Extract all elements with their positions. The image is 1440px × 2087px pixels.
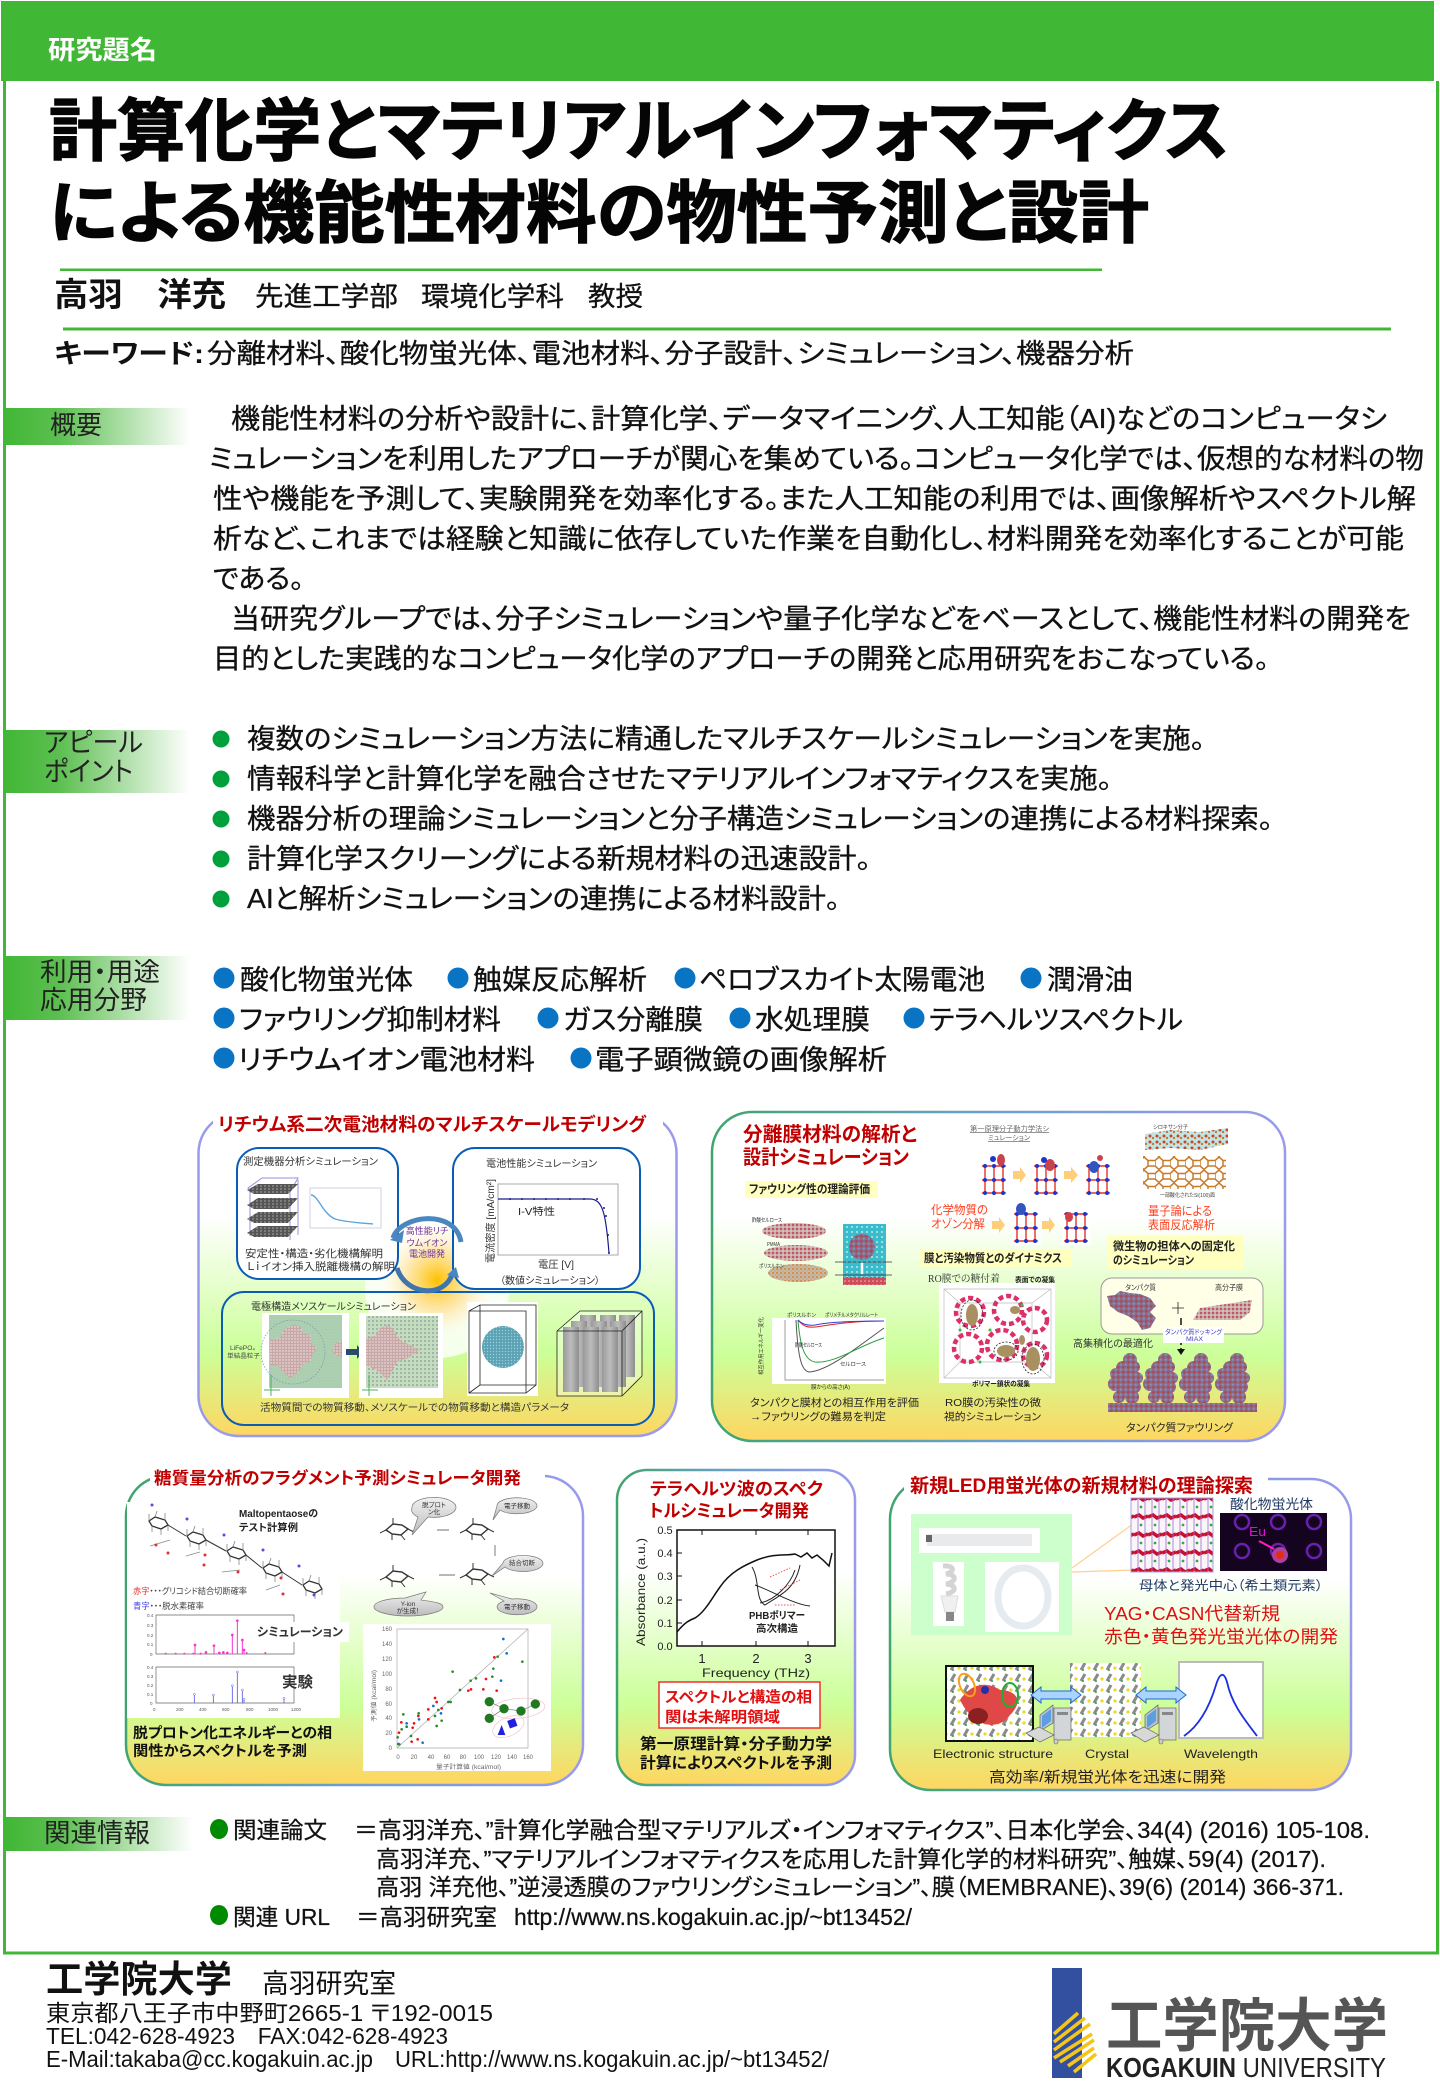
absorbance chart: 0.0 <box>657 1641 673 1653</box>
overview text: 機能性材料の分析や設計に、計算化学、データマイニング、人工知能（AI)などのコンピュータシ <box>231 403 1387 434</box>
red development text: 赤色・黄色発光蛍光体の開発 <box>1104 1627 1338 1647</box>
polymer structure sketch <box>752 1565 810 1606</box>
interaction energy chart: 酢酸セルロース <box>795 1341 822 1349</box>
correlation scatter plot: 20 <box>385 1731 393 1737</box>
reaction scheme: 電子移動 <box>504 1602 530 1611</box>
footer: university contact: 東京都八王子市中野町2665-1 〒192-0015 <box>46 2000 493 2026</box>
I-V chart: I-V特性 <box>518 1205 555 1218</box>
absorption graph <box>310 1188 381 1228</box>
application items: ファウリング抑制材料 <box>239 1004 501 1035</box>
panel caption <box>640 1734 832 1772</box>
header band <box>1 1 1434 81</box>
panel title <box>150 1468 545 1494</box>
membrane polymer models: ポリスルホン <box>759 1263 785 1270</box>
panel caption <box>133 1724 332 1760</box>
panel caption: 関性からスペクトルを予測 <box>133 1742 307 1760</box>
footer: university contact: 工学院大学 <box>46 1959 232 2000</box>
layered structure <box>247 1178 298 1240</box>
spiral bulb <box>933 1562 964 1626</box>
correlation scatter plot: 100 <box>382 1672 393 1678</box>
application items: 潤滑油 <box>1047 964 1133 995</box>
docking label and arrow: タンパク質ドッキング <box>1165 1327 1223 1336</box>
tube lamp <box>919 1528 1040 1553</box>
appeal bullet list: 複数のシミュレーション方法に精通したマルチスケールシミュレーションを実施。 <box>247 723 1205 754</box>
footer: university contact: TEL:042-628-4923 FAX:042-628-4923 <box>46 2023 448 2049</box>
simulated spectrum: 0.3 <box>147 1623 154 1628</box>
tab: overview <box>3 408 190 445</box>
mesoscale image 1 <box>261 1313 349 1398</box>
experimental spectrum: 200 <box>176 1707 184 1712</box>
cylinder array <box>557 1311 642 1396</box>
absorbance chart: 0.3 <box>657 1571 673 1583</box>
first-principles MD heading: ミュレーション <box>988 1135 1030 1142</box>
I-V chart: 電圧 [V] <box>538 1259 574 1271</box>
panel: separation membrane simulation: タンパク質ファウリング <box>1125 1421 1234 1434</box>
panel: lithium battery multiscale modeling <box>198 1106 676 1436</box>
correlation scatter plot: 予測値 (kcal/mol) <box>370 1670 378 1722</box>
protein and polymer film box: タンパク質 <box>1125 1282 1156 1292</box>
maltopentaose chain <box>149 1511 322 1599</box>
RO caption: RO膜の汚染性の微 <box>945 1396 1042 1409</box>
panel: separation membrane simulation: 高集積化の最適化 <box>1073 1337 1153 1350</box>
logo: Kogakuin University: KOGAKUIN UNIVERSITY <box>1106 2052 1386 2083</box>
section: overview <box>3 403 1424 674</box>
experimental spectrum <box>147 1665 302 1712</box>
application items: 水処理膜 <box>755 1004 870 1035</box>
absorbance chart: Frequency (THz) <box>702 1666 810 1680</box>
correlation scatter plot: 140 <box>382 1642 393 1648</box>
panel: separation membrane simulation: ポリマー鎖状の凝集 <box>972 1379 1030 1388</box>
correlation scatter plot: 100 <box>474 1755 485 1761</box>
papers and URL list: 関連論文 <box>233 1817 327 1843</box>
absorbance chart: 0.1 <box>657 1618 673 1630</box>
box: electrode mesoscale simulation <box>222 1292 654 1425</box>
red callout <box>659 1682 820 1728</box>
experimental spectrum: 0 <box>153 1707 156 1712</box>
RO membrane network <box>939 1283 1055 1383</box>
heading: membrane dynamics: 膜と汚染物質とのダイナミクス <box>924 1251 1062 1265</box>
speech bubbles <box>374 1497 543 1616</box>
protein fouling model <box>1108 1353 1257 1412</box>
siloxane surface model: 一部酸化されたSi(100)面 <box>1160 1191 1215 1199</box>
wavelength plot <box>1179 1662 1263 1738</box>
box: measurement simulation: 測定機器分析シミュレーション <box>243 1155 379 1168</box>
oxide phosphor label: 酸化物蛍光体 <box>1230 1497 1314 1512</box>
reaction scheme: 脱プロト <box>422 1500 446 1509</box>
papers and URL list: 高羽洋充、”マテリアルインフォマティクスを応用した計算化学的材料研究”、触媒、59(4) (2017). <box>376 1846 1326 1872</box>
crystal image <box>1070 1663 1141 1737</box>
ozone decomposition label: オゾン分解 <box>931 1217 985 1231</box>
application items: リチウムイオン電池材料 <box>238 1044 535 1075</box>
protein and polymer film box <box>1101 1278 1263 1334</box>
panel: terahertz spectrum simulator <box>617 1470 855 1785</box>
panel caption: 高効率/新規蛍光体を迅速に開発 <box>989 1769 1226 1786</box>
absorbance chart <box>634 1525 835 1680</box>
first-principles MD heading: 第一原理分子動力学法シ <box>970 1124 1049 1133</box>
correlation scatter plot: 40 <box>428 1755 435 1761</box>
reaction scheme: ン化 <box>427 1507 441 1516</box>
experimental spectrum: 0.3 <box>147 1674 154 1679</box>
appeal bullet list: 計算化学スクリーングによる新規材料の迅速設計。 <box>247 843 871 874</box>
label: experiment: 実験 <box>282 1674 313 1691</box>
footer: university contact <box>46 1959 830 2072</box>
absorbance chart: 0.5 <box>657 1525 673 1537</box>
author and affiliation: 先進工学部 <box>255 282 398 312</box>
simulated spectrum: 0.4 <box>147 1613 154 1618</box>
panel title: 分離膜材料の解析と <box>743 1123 917 1146</box>
panel caption: 第一原理計算・分子動力学 <box>640 1734 832 1753</box>
box: battery performance simulation: 電池性能シミュレーション <box>486 1157 598 1170</box>
papers and URL list <box>210 1817 1370 1930</box>
keywords: キーワード: <box>54 339 204 369</box>
image labels <box>933 1747 1258 1761</box>
arrow: mesoscale process <box>346 1345 363 1359</box>
application items: ガス分離膜 <box>563 1004 703 1035</box>
protein and polymer film box: 高分子膜 <box>1215 1282 1243 1292</box>
red development text: YAG・CASN代替新規 <box>1104 1604 1280 1624</box>
reaction scheme: 電子移動 <box>504 1501 530 1510</box>
siloxane surface model: シロキサン分子 <box>1153 1123 1188 1131</box>
author and affiliation <box>54 276 643 313</box>
membrane polymer models: 酢酸セルロース <box>752 1216 782 1224</box>
Eu emission map <box>1220 1513 1327 1571</box>
overview text: 目的とした実践的なコンピュータ化学のアプローチの開発と応用研究をおこなっている。 <box>213 643 1269 674</box>
papers and URL list: ＝高羽研究室 <box>356 1904 497 1930</box>
panel: LED phosphor exploration <box>890 1470 1351 1790</box>
box: measurement simulation: 安定性・構造・劣化機構解明 <box>245 1247 383 1260</box>
papers and URL list: http://www.ns.kogakuin.ac.jp/~bt13452/ <box>514 1904 913 1930</box>
simulated spectrum: 0.1 <box>147 1642 154 1647</box>
simulated spectrum <box>147 1613 294 1657</box>
interaction energy chart: セルロース <box>840 1361 866 1368</box>
first-principles MD heading <box>970 1124 1049 1142</box>
tab: related information: 関連情報 <box>44 1818 150 1848</box>
section: applications <box>3 956 1183 1075</box>
logo: Kogakuin University: 工学院大学 <box>1106 1994 1388 2059</box>
quantum analysis label: 量子論による <box>1148 1203 1212 1218</box>
correlation scatter plot: 120 <box>491 1755 502 1761</box>
correlation scatter plot: 160 <box>523 1755 534 1761</box>
membrane polymer models <box>752 1216 828 1282</box>
reaction scheme: 結合切断 <box>509 1558 536 1567</box>
correlation scatter plot: 0 <box>389 1746 393 1752</box>
appeal bullet list: 情報科学と計算化学を融合させたマテリアルインフォマティクスを実施。 <box>247 763 1112 794</box>
ring lamp <box>985 1562 1059 1632</box>
application items: テラヘルツスペクトル <box>929 1004 1183 1035</box>
box: electrode mesoscale simulation: 電極構造メソスケールシミュレーション <box>251 1300 417 1313</box>
experimental spectrum: 0.2 <box>147 1683 154 1688</box>
heading: microbe immobilization: のシミュレーション <box>1113 1255 1194 1267</box>
LiFePO4 label: LiFePO₄ <box>230 1346 256 1352</box>
appeal bullet list: AIと解析シミュレーションの連携による材料設計。 <box>247 883 840 914</box>
image labels: Electronic structure <box>933 1747 1053 1761</box>
panel caption: 脱プロトン化エネルギーとの相 <box>133 1724 332 1742</box>
footer: university contact: 高羽研究室 <box>262 1969 396 1999</box>
double arrows <box>1031 1687 1186 1703</box>
correlation scatter plot: 140 <box>507 1755 518 1761</box>
sphere cell <box>467 1302 538 1396</box>
I-V chart <box>484 1179 618 1287</box>
panel title: 設計シミュレーション <box>743 1146 909 1169</box>
tab: applications <box>3 956 190 1020</box>
reaction scheme: が生成！ <box>397 1606 419 1615</box>
RO caption <box>944 1396 1042 1423</box>
legend text: 赤字・・・グリコシド結合切断確率 <box>133 1586 247 1596</box>
absorbance chart: PHBポリマー <box>749 1610 805 1622</box>
tab: appeal points <box>3 728 190 793</box>
image labels: Wavelength <box>1184 1747 1258 1761</box>
host and center label: 母体と発光中心（希土類元素） <box>1139 1578 1323 1593</box>
panel title: トルシミュレータ開発 <box>649 1501 809 1521</box>
red callout: 関は未解明領域 <box>665 1708 780 1726</box>
ozone decomposition label <box>931 1202 988 1231</box>
heading: microbe immobilization: 微生物の担体への固定化 <box>1113 1239 1235 1253</box>
author and affiliation: 環境化学科 <box>421 282 564 312</box>
box: measurement simulation: Ｌｉイオン挿入脱離機構の解明 <box>247 1260 395 1273</box>
reaction scheme <box>374 1497 543 1616</box>
experimental spectrum: 0.1 <box>147 1692 154 1697</box>
keywords: 分離材料、酸化物蛍光体、電池材料、分子設計、シミュレーション、機器分析 <box>207 339 1134 369</box>
RO membrane labels: RO膜での糖付着 <box>928 1272 1000 1285</box>
keyword rule <box>63 328 1391 330</box>
title: による機能性材料の物性予測と設計 <box>49 176 1149 252</box>
panel: separation membrane simulation: 表面での凝集 <box>1015 1275 1055 1284</box>
overview text: 析など、これまでは経験と知識に依存していた作業を自動化し、材料開発を効率化することが可能 <box>213 523 1404 554</box>
cycle arrows and label <box>390 1219 461 1291</box>
quantum analysis label: 表面反応解析 <box>1148 1218 1215 1232</box>
callout lines <box>1072 1498 1169 1572</box>
red callout: スペクトルと構造の相 <box>665 1688 812 1706</box>
label: simulation <box>252 1622 349 1642</box>
section: related information <box>5 1817 1370 1930</box>
section: appeal points <box>3 723 1273 914</box>
computer icons <box>1026 1705 1176 1744</box>
absorbance chart: 0.4 <box>657 1548 673 1560</box>
box: battery performance simulation <box>453 1148 640 1289</box>
experimental spectrum: 800 <box>246 1707 254 1712</box>
membrane polymer models: PMMA <box>767 1242 780 1248</box>
application items: 電子顕微鏡の画像解析 <box>595 1044 887 1075</box>
absorbance chart: 3 <box>804 1651 812 1666</box>
LiFePO4 label: 単結晶粒子 <box>227 1352 260 1360</box>
appeal bullet list <box>212 723 1273 914</box>
box: measurement simulation <box>237 1148 398 1279</box>
experimental spectrum: 0.4 <box>147 1665 154 1670</box>
cycle arrows and label: 高性能リチ <box>406 1225 449 1236</box>
correlation scatter plot: 120 <box>382 1657 393 1663</box>
legend text <box>133 1586 247 1611</box>
RO caption: 視的シミュレーション <box>944 1410 1041 1423</box>
I-V chart: 電流密度 [mA/cm²] <box>484 1179 497 1263</box>
panel title <box>743 1123 917 1169</box>
panel title: 糖質量分析のフラグメント予測シミュレータ開発 <box>154 1468 521 1488</box>
lamp photo box <box>911 1514 1072 1635</box>
docking label and arrow <box>1163 1318 1224 1355</box>
heading: fouling evaluation: ファウリング性の理論評価 <box>749 1182 870 1196</box>
reaction scheme: Y-ion <box>401 1601 416 1608</box>
crystal structure <box>1131 1498 1213 1572</box>
tab: applications: 利用・用途 <box>40 957 160 987</box>
author and affiliation: 教授 <box>588 282 643 312</box>
cycle arrows and label: 電池開発 <box>409 1248 445 1259</box>
ozone decomposition frames <box>979 1152 1113 1245</box>
correlation scatter plot: 40 <box>385 1716 393 1722</box>
correlation scatter plot: 80 <box>460 1755 467 1761</box>
panel title <box>213 1106 663 1136</box>
tab: related information <box>5 1817 193 1851</box>
left white figure: テスト計算例 <box>239 1521 298 1534</box>
LiFePO4 label <box>227 1346 260 1360</box>
interaction energy chart: 相互作用エネルギー変化 <box>757 1317 765 1375</box>
appeal bullet list: 機器分析の理論シミュレーションと分子構造シミュレーションの連携による材料探索。 <box>247 803 1273 834</box>
heading: membrane dynamics <box>919 1249 1071 1267</box>
correlation scatter plot: 160 <box>382 1627 393 1633</box>
absorbance chart: 2 <box>752 1651 760 1666</box>
author and affiliation: 高羽 洋充 <box>54 276 226 313</box>
interaction energy chart: 膜からの高さ(Å) <box>811 1383 850 1391</box>
solvated membrane model <box>835 1224 892 1285</box>
simulated spectrum: 0.2 <box>147 1633 154 1638</box>
heading: microbe immobilization <box>1108 1236 1243 1269</box>
application items <box>214 964 1183 1075</box>
fouling caption: タンパクと膜材との相互作用を評価 <box>749 1396 919 1409</box>
fouling caption <box>749 1396 919 1423</box>
docking label and arrow: MIAX <box>1186 1336 1204 1343</box>
center glow <box>365 1222 509 1358</box>
image labels: Crystal <box>1085 1747 1129 1761</box>
correlation scatter plot: 量子計算値 (kcal/mol) <box>436 1763 501 1771</box>
author rule <box>60 268 1102 271</box>
papers and URL list: 高羽 洋充他、”逆浸透膜のファウリングシミュレーション”、膜（MEMBRANE)、39(6) (2014) 366-371. <box>376 1874 1344 1900</box>
correlation scatter plot: 20 <box>411 1755 418 1761</box>
panel: separation membrane simulation <box>712 1112 1285 1441</box>
overview text <box>209 403 1424 674</box>
panel title <box>649 1479 823 1521</box>
experimental spectrum: 1200 <box>291 1707 302 1712</box>
application items: 触媒反応解析 <box>473 964 647 995</box>
fouling caption: →ファウリングの難易を判定 <box>750 1410 887 1423</box>
absorbance chart: 0.2 <box>657 1595 673 1607</box>
correlation scatter plot <box>363 1624 551 1771</box>
absorbance chart: 1 <box>698 1651 706 1666</box>
siloxane surface model <box>1143 1123 1228 1199</box>
quantum analysis label <box>1148 1203 1215 1232</box>
correlation scatter plot: 60 <box>444 1755 451 1761</box>
left white figure: Maltopentaoseの <box>239 1509 318 1520</box>
left white figure <box>127 1502 349 1718</box>
mesoscale image 2 <box>359 1313 443 1398</box>
overview text: 性や機能を予測して、実験開発を効率化する。また人工知能の利用では、画像解析やスペクトル解 <box>213 483 1416 514</box>
panel title: リチウム系二次電池材料のマルチスケールモデリング <box>218 1114 647 1135</box>
tab: overview: 概要 <box>50 410 102 440</box>
panel caption: 計算によりスペクトルを予測 <box>640 1753 832 1772</box>
experimental spectrum: 1000 <box>268 1707 279 1712</box>
logo stripes <box>1054 2013 1096 2072</box>
tab: applications: 応用分野 <box>40 985 147 1015</box>
cycle arrows and label: ウムイオン <box>407 1238 448 1248</box>
correlation scatter plot: 0 <box>396 1755 400 1761</box>
papers and URL list: ＝高羽洋充、”計算化学融合型マテリアルズ・インフォマティクス”、日本化学会、34(4) (2016) 105-108. <box>354 1817 1370 1843</box>
absorbance chart: 高次構造 <box>756 1622 798 1635</box>
electronic structure image <box>946 1666 1033 1741</box>
heading: fouling evaluation <box>745 1181 878 1198</box>
title <box>49 94 1229 252</box>
application items: ペロブスカイト太陽電池 <box>699 964 985 995</box>
interaction energy chart <box>757 1311 886 1391</box>
interaction energy chart: ポリスルホン <box>787 1312 817 1319</box>
tab: appeal points: アピール <box>44 728 143 758</box>
overview text: 当研究グループでは、分子シミュレーションや量子化学などをベースとして、機能性材料の開発を <box>231 603 1411 634</box>
correlation scatter plot: 60 <box>385 1702 393 1708</box>
I-V chart: （数値シミュレーション） <box>500 1274 600 1287</box>
papers and URL list: 関連 URL <box>233 1904 330 1930</box>
experimental spectrum: 0 <box>150 1701 153 1706</box>
correlation scatter plot: 80 <box>385 1687 393 1693</box>
panel title: 新規LED用蛍光体の新規材料の理論探索 <box>910 1474 1253 1497</box>
red development text <box>1104 1604 1338 1647</box>
application items: 酸化物蛍光体 <box>240 964 413 995</box>
Eu emission map: Eu <box>1249 1524 1266 1539</box>
experimental spectrum: 400 <box>199 1707 207 1712</box>
experimental spectrum: 600 <box>222 1707 230 1712</box>
label: simulation: シミュレーション <box>257 1625 343 1639</box>
box: electrode mesoscale simulation: 活物質間での物質移動、メソスケールでの物質移動と構造パラメータ <box>260 1401 569 1414</box>
logo: Kogakuin University <box>1052 1968 1388 2083</box>
label: research title: 研究題名 <box>48 35 157 65</box>
panel title: テラヘルツ波のスペク <box>650 1479 823 1499</box>
panel: glycan fragment prediction <box>126 1468 583 1785</box>
footer: university contact: E-Mail:takaba@cc.kogakuin.ac.jp URL:http://www.ns.kogakuin.ac.jp/~bt13452/ <box>46 2046 830 2072</box>
ozone decomposition label: 化学物質の <box>931 1202 988 1217</box>
interaction energy chart: ポリメチルメタクリルレート <box>825 1311 878 1319</box>
title: 計算化学とマテリアルインフォマティクス <box>49 94 1229 170</box>
legend text: 青字・・・脱水素確率 <box>133 1601 204 1611</box>
simulated spectrum: 0 <box>150 1652 153 1657</box>
tab: appeal points: ポイント <box>44 757 133 787</box>
absorbance chart: Absorbance (a.u.) <box>634 1538 648 1646</box>
overview text: である。 <box>213 563 304 594</box>
overview text: ミュレーションを利用したアプローチが関心を集めている。コンピュータ化学では、仮想的な材料の物 <box>209 443 1424 474</box>
